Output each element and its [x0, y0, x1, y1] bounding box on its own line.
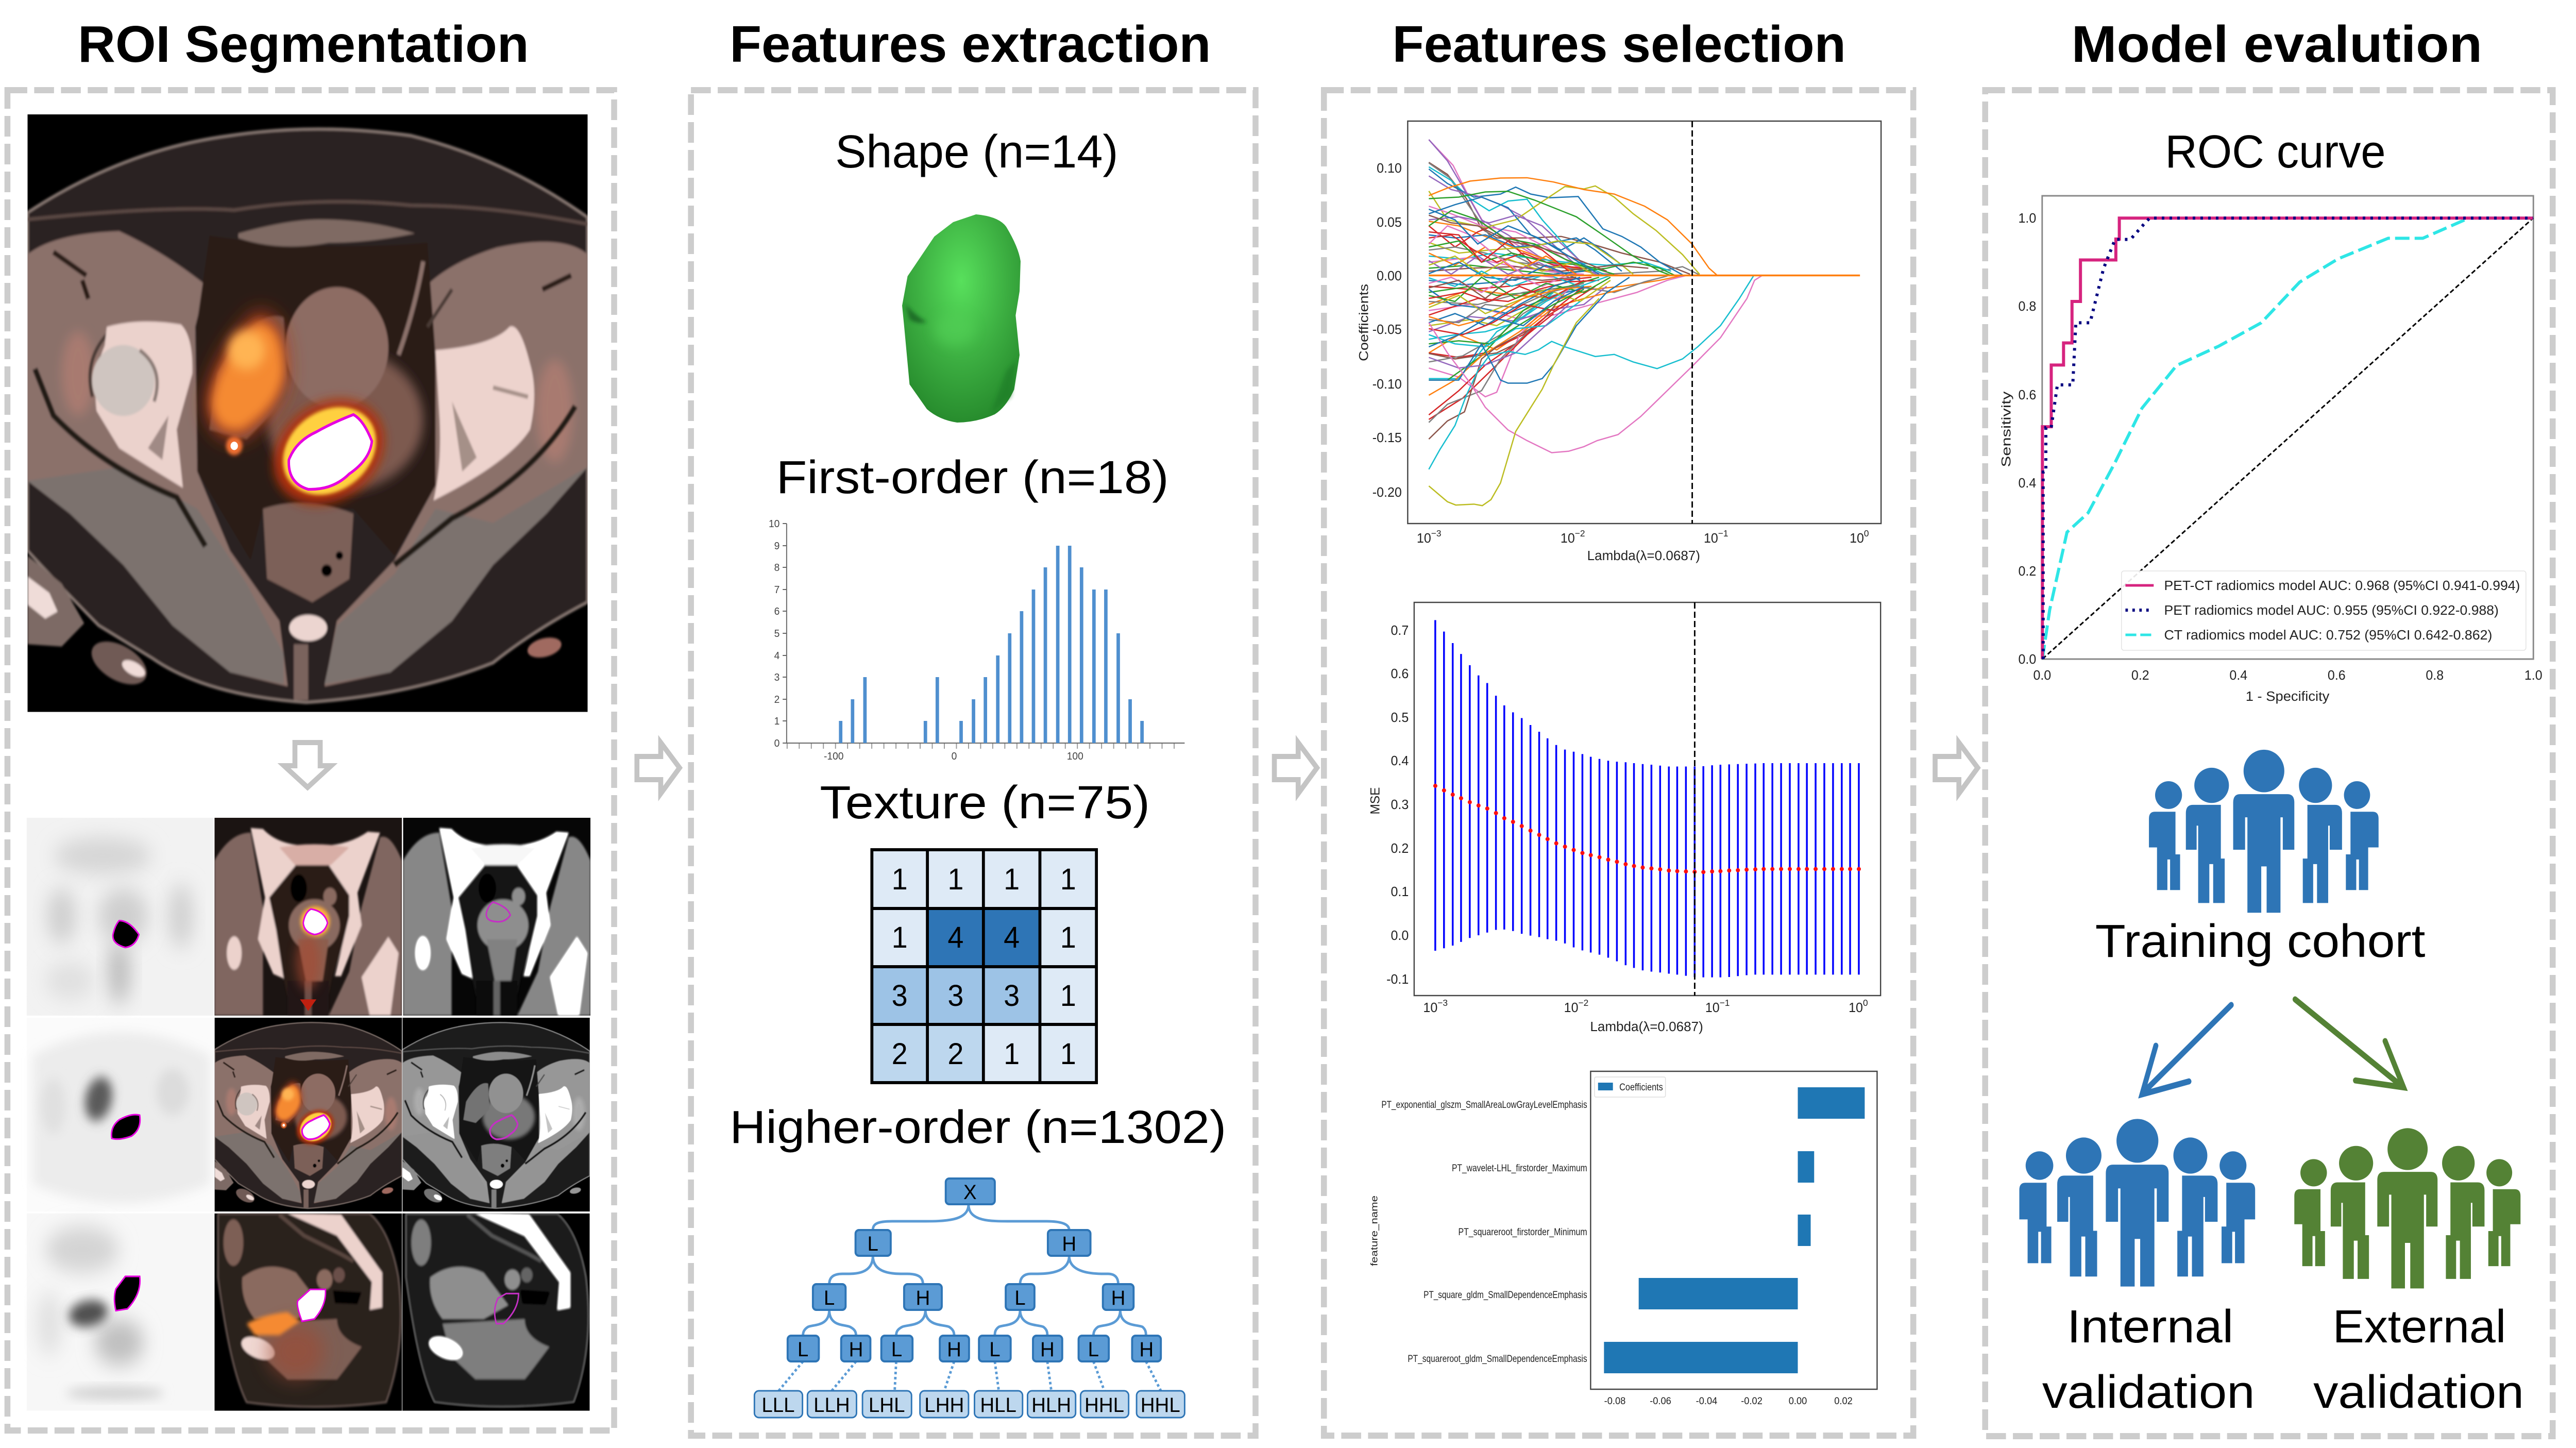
- label: Internal validation: validation: [2042, 1366, 2255, 1418]
- image: PET sagittal: [27, 1214, 214, 1411]
- chart: texture matrix: 1: [1060, 979, 1076, 1013]
- chart: MSE cross-validation: −1: [1720, 998, 1730, 1008]
- legend: ROC models: PET-CT radiomics model AUC: 0.968 (95%CI 0.941-0.994): [2164, 579, 2520, 593]
- chart: selected feature coefficients: 0.02: [1834, 1395, 1853, 1406]
- chart: texture matrix: 4: [1004, 921, 1020, 954]
- image grid: PET, fused and CT views: [27, 818, 590, 1411]
- chart: ROC curves: Sensitivity: [1999, 391, 2013, 467]
- chart: LASSO coefficient paths: -0.20: [1372, 485, 1402, 500]
- chart: wavelet decomposition tree: H: [1040, 1338, 1055, 1361]
- chart: selected feature coefficients: PT_wavelet-LHL_firstorder_Maximum: [1452, 1163, 1587, 1174]
- chart: first-order histogram: 0: [952, 751, 957, 762]
- chart: selected feature coefficients: -0.06: [1650, 1395, 1671, 1406]
- icon: training cohort people: [2149, 750, 2379, 913]
- image: PET coronal: [27, 818, 214, 1016]
- chart: wavelet decomposition tree: HLL: [980, 1393, 1016, 1417]
- chart: first-order histogram: 5: [774, 628, 779, 639]
- chart: texture matrix: 1: [892, 921, 908, 954]
- label: Shape: Shape (n=14): [835, 125, 1118, 177]
- chart: MSE cross-validation: 0.6: [1391, 667, 1409, 681]
- chart: selected feature coefficients: PT_exponential_glszm_SmallAreaLowGrayLevelEmphasis: [1381, 1099, 1587, 1110]
- chart: texture matrix: 1: [892, 863, 908, 896]
- chart: texture matrix: [872, 850, 1096, 1083]
- chart: MSE cross-validation: Lambda(λ=0.0687): [1590, 1020, 1703, 1034]
- panel: ROI segmentation: [7, 90, 614, 1430]
- title: Model evalution: Model evalution: [2072, 15, 2482, 73]
- chart: MSE cross-validation: 0.4: [1391, 754, 1409, 768]
- image: fused coronal: [214, 818, 402, 1016]
- chart: LASSO coefficient paths: 10: [1561, 531, 1575, 546]
- chart: first-order histogram: [769, 518, 1184, 762]
- chart: texture matrix: 4: [947, 921, 963, 954]
- title: ROI Segmentation: ROI Segmentation: [78, 15, 529, 73]
- chart: MSE cross-validation: 10: [1705, 1001, 1720, 1015]
- image: PET axial: [27, 1018, 214, 1211]
- label: External validation: [2313, 1300, 2524, 1418]
- chart: ROC curves: 0.4: [2019, 476, 2036, 491]
- label: Training cohort: Training cohort: [2095, 915, 2426, 967]
- chart: ROC curves: 0.8: [2426, 668, 2444, 683]
- chart: LASSO coefficient paths: 0: [1864, 528, 1869, 538]
- chart: LASSO coefficient paths: −1: [1718, 528, 1728, 538]
- chart: texture matrix: 1: [1060, 863, 1076, 896]
- chart: MSE cross-validation: 0.0: [1391, 929, 1409, 943]
- chart: wavelet decomposition tree: H: [947, 1338, 961, 1361]
- arrow: extraction to selection: [1275, 743, 1317, 794]
- title: Features selection: Features selection: [1393, 15, 1846, 73]
- chart: LASSO coefficient paths: -0.05: [1372, 323, 1402, 337]
- legend: coefficients: [1595, 1077, 1666, 1097]
- chart: ROC curves: 1 - Specificity: [2246, 689, 2330, 704]
- chart: selected feature coefficients: [1369, 1071, 1877, 1406]
- chart: first-order histogram: 6: [774, 606, 779, 617]
- chart: ROC curves: 1.0: [2019, 211, 2036, 226]
- chart: LASSO coefficient paths: -0.15: [1372, 431, 1402, 445]
- chart: LASSO coefficient paths: −2: [1575, 528, 1585, 538]
- chart: wavelet decomposition tree: H: [1062, 1232, 1076, 1255]
- chart: LASSO coefficient paths: 0.05: [1377, 215, 1402, 230]
- chart: ROC curves: 0.0: [2019, 652, 2036, 667]
- chart: wavelet decomposition tree: L: [1088, 1338, 1099, 1361]
- chart: LASSO coefficient paths: 0.10: [1377, 161, 1402, 176]
- icon: external validation people: [2294, 1128, 2520, 1288]
- label: Internal validation: Internal: [2067, 1300, 2233, 1352]
- chart: MSE cross-validation: 0.5: [1391, 711, 1409, 725]
- chart: wavelet decomposition tree: [754, 1178, 1184, 1418]
- chart: wavelet decomposition tree: LHL: [869, 1393, 905, 1417]
- chart: MSE cross-validation: 0.3: [1391, 798, 1409, 812]
- image: CT sagittal: [402, 1214, 590, 1411]
- chart: wavelet decomposition tree: H: [1111, 1286, 1125, 1309]
- chart: MSE cross-validation: 10: [1423, 1001, 1437, 1015]
- chart: MSE cross-validation: −2: [1578, 998, 1588, 1008]
- chart: texture matrix: 1: [1004, 863, 1020, 896]
- label: Internal validation: [2042, 1300, 2255, 1418]
- chart: MSE cross-validation: [1368, 602, 1880, 1034]
- chart: MSE cross-validation: 10: [1849, 1001, 1863, 1015]
- chart: wavelet decomposition tree: LLL: [761, 1393, 795, 1417]
- chart: texture matrix: 3: [892, 979, 908, 1013]
- chart: LASSO coefficient paths: Coefficients: [1357, 284, 1371, 361]
- arrow: segmentation to extraction: [637, 743, 680, 794]
- chart: ROC curves: 0.0: [2033, 668, 2051, 683]
- chart: first-order histogram: 1: [774, 716, 779, 727]
- label: Higher-order: Higher-order (n=1302): [730, 1101, 1226, 1153]
- chart: wavelet decomposition tree: H: [916, 1286, 930, 1309]
- chart: wavelet decomposition tree: L: [868, 1232, 878, 1255]
- chart: first-order histogram: 9: [774, 541, 779, 552]
- legend: coefficients: Coefficients: [1619, 1082, 1663, 1092]
- chart: selected feature coefficients: feature_name: [1369, 1196, 1380, 1266]
- image: CT coronal: [403, 818, 590, 1016]
- chart: LASSO coefficient paths: 10: [1704, 531, 1718, 546]
- chart: selected feature coefficients: PT_squareroot_firstorder_Minimum: [1458, 1226, 1587, 1238]
- legend: ROC models: CT radiomics model AUC: 0.752 (95%CI 0.642-0.862): [2164, 628, 2492, 643]
- chart: MSE cross-validation: 10: [1564, 1001, 1578, 1015]
- chart: first-order histogram: 0: [774, 738, 779, 749]
- chart: LASSO coefficient paths: 0.00: [1377, 269, 1402, 283]
- label: Texture: Texture (n=75): [820, 776, 1150, 828]
- chart: texture matrix: 3: [947, 979, 963, 1013]
- chart: MSE cross-validation: MSE: [1368, 787, 1382, 814]
- chart: first-order histogram: 100: [1067, 751, 1083, 762]
- chart: ROC curves: [1999, 196, 2543, 704]
- chart: MSE cross-validation: 0.1: [1391, 885, 1409, 899]
- chart: first-order histogram: 3: [774, 672, 779, 683]
- arrow: down to image grid: [284, 743, 331, 787]
- chart: ROC curves: 0.2: [2131, 668, 2149, 683]
- chart: wavelet decomposition tree: L: [1014, 1286, 1026, 1309]
- icon: internal validation people: [2019, 1119, 2255, 1287]
- chart: texture matrix: 2: [892, 1037, 908, 1071]
- chart: first-order histogram: 8: [774, 562, 779, 574]
- chart: wavelet decomposition tree: H: [1139, 1338, 1154, 1361]
- image: CT axial: [402, 1018, 590, 1211]
- arrow: to internal validation: [2142, 1005, 2231, 1095]
- chart: wavelet decomposition tree: L: [824, 1286, 835, 1309]
- chart: wavelet decomposition tree: HLH: [1031, 1393, 1071, 1417]
- chart: LASSO coefficient paths: -0.10: [1372, 377, 1402, 392]
- image: fused axial: [215, 1018, 402, 1211]
- icon: green tumor 3D shape: [902, 214, 1021, 423]
- chart: texture matrix: 2: [947, 1037, 963, 1071]
- legend: ROC models: PET radiomics model AUC: 0.955 (95%CI 0.922-0.988): [2164, 603, 2499, 618]
- panel: model evaluation: [1985, 90, 2553, 1436]
- chart: wavelet decomposition tree: LLH: [814, 1393, 850, 1417]
- chart: ROC curves: 0.2: [2019, 564, 2036, 579]
- chart: wavelet decomposition tree: H: [849, 1338, 863, 1361]
- chart: texture matrix: 1: [947, 863, 963, 896]
- chart: ROC curves: 0.6: [2328, 668, 2346, 683]
- chart: selected feature coefficients: PT_squareroot_gldm_SmallDependenceEmphasis: [1408, 1353, 1587, 1365]
- chart: selected feature coefficients: PT_square_gldm_SmallDependenceEmphasis: [1423, 1289, 1587, 1301]
- chart: wavelet decomposition tree: X: [963, 1181, 977, 1204]
- chart: texture matrix: 1: [1060, 921, 1076, 954]
- chart: MSE cross-validation: −3: [1437, 998, 1448, 1008]
- label: External validation: validation: [2313, 1366, 2524, 1418]
- image: large fused PET-CT axial slice: [27, 114, 588, 712]
- chart: LASSO coefficient paths: −3: [1431, 528, 1442, 538]
- chart: wavelet decomposition tree: HHL: [1084, 1393, 1124, 1417]
- chart: texture matrix: 1: [1004, 1037, 1020, 1071]
- image: fused sagittal: [214, 1214, 402, 1411]
- chart: ROC curves: 0.8: [2019, 299, 2036, 314]
- chart: LASSO coefficient paths: 10: [1417, 531, 1431, 546]
- chart: wavelet decomposition tree: L: [798, 1338, 808, 1361]
- chart: LASSO coefficient paths: 10: [1850, 531, 1864, 546]
- chart: MSE cross-validation: 0.2: [1391, 841, 1409, 856]
- arrow: to external validation: [2295, 999, 2403, 1087]
- chart: first-order histogram: 4: [774, 650, 779, 662]
- chart: wavelet decomposition tree: LHH: [924, 1393, 964, 1417]
- chart: wavelet decomposition tree: L: [891, 1338, 902, 1361]
- chart: ROC curves: 0.4: [2229, 668, 2247, 683]
- chart: MSE cross-validation: -0.1: [1386, 972, 1409, 987]
- title: Features extraction: Features extraction: [730, 15, 1211, 73]
- chart: first-order histogram: 7: [774, 584, 779, 596]
- chart: texture matrix: 3: [1004, 979, 1020, 1013]
- chart: MSE cross-validation: 0.7: [1391, 624, 1409, 638]
- legend: ROC models: [2122, 571, 2526, 650]
- chart: texture matrix: 1: [1060, 1037, 1076, 1071]
- label: External validation: External: [2333, 1300, 2506, 1352]
- chart: MSE cross-validation: 0: [1863, 998, 1868, 1008]
- chart: selected feature coefficients: -0.04: [1696, 1395, 1717, 1406]
- chart: wavelet decomposition tree: L: [989, 1338, 1001, 1361]
- chart: selected feature coefficients: 0.00: [1789, 1395, 1807, 1406]
- label: First-order: First-order (n=18): [776, 451, 1169, 503]
- chart: selected feature coefficients: -0.02: [1741, 1395, 1762, 1406]
- chart: first-order histogram: 10: [769, 518, 779, 530]
- chart: first-order histogram: -100: [824, 751, 844, 762]
- chart: LASSO coefficient paths: [1357, 121, 1881, 563]
- chart: ROC curves: 0.6: [2019, 388, 2036, 402]
- chart: selected feature coefficients: -0.08: [1604, 1395, 1625, 1406]
- panel: features selection: [1324, 90, 1913, 1436]
- panel: features extraction: [691, 90, 1256, 1436]
- chart: first-order histogram: 2: [774, 694, 779, 705]
- chart: wavelet decomposition tree: HHL: [1141, 1393, 1180, 1417]
- label: ROC curve: ROC curve: [2165, 125, 2386, 177]
- chart: LASSO coefficient paths: Lambda(λ=0.0687): [1587, 549, 1700, 563]
- chart: ROC curves: 1.0: [2524, 668, 2543, 683]
- arrow: selection to evaluation: [1935, 743, 1978, 794]
